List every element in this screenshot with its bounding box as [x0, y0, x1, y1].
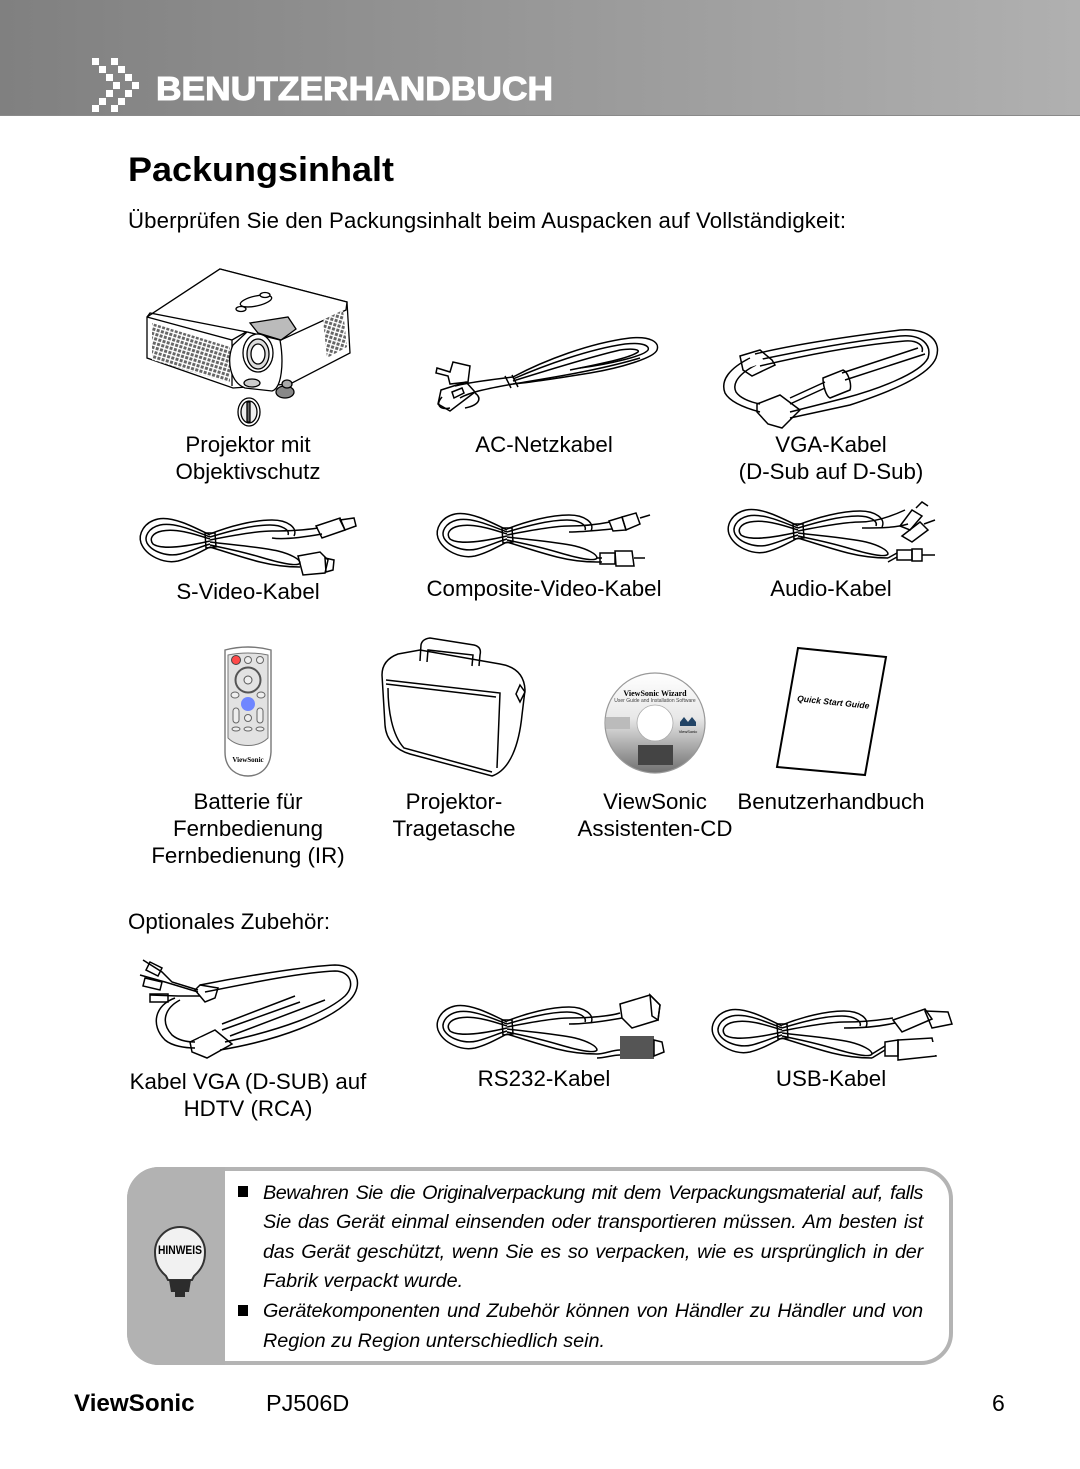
label: composite: Composite-Video-Kabel: [426, 576, 662, 601]
label: bag: Projektor-: [406, 789, 502, 814]
label: bag: Tragetasche: [392, 816, 516, 841]
illustration: composite video cable: [437, 513, 650, 566]
footer brand: ViewSonic: [74, 1390, 195, 1417]
label: VGA HDTV: HDTV (RCA): [184, 1096, 312, 1121]
note bullet 1: [238, 1186, 248, 1197]
label: remote: [151, 789, 345, 868]
label: remote: Batterie für: [193, 789, 303, 814]
label: VGA cable: VGA-Kabel: [775, 432, 887, 457]
illustration: S-Video cable: [140, 518, 356, 575]
icon: HINWEIS light bulb: [155, 1227, 205, 1297]
illustration: RS232 cable: [437, 995, 664, 1059]
label: bag: [392, 789, 516, 841]
label: CD: [578, 789, 732, 841]
icon: double chevron: [92, 58, 139, 112]
header title: BENUTZERHANDBUCH: [156, 70, 553, 107]
illustration: remote control: ViewSonic: [232, 756, 264, 764]
illustration: wizard CD: ViewSonic: [679, 729, 697, 734]
label: VGA HDTV: [130, 1069, 367, 1121]
note line 5: Gerätekomponenten und Zubehör können von Händler zu Händler und von: [263, 1300, 923, 1322]
note line 4: Fabrik verpackt wurde.: [263, 1270, 463, 1292]
page number: 6: [992, 1390, 1005, 1416]
label: remote: Fernbedienung: [173, 816, 323, 841]
label: AC cord: AC-Netzkabel: [475, 432, 613, 457]
page heading: Packungsinhalt: [128, 151, 394, 189]
illustration: quick start guide booklet: Quick Start Guide: [797, 693, 870, 711]
label: audio: Audio-Kabel: [770, 576, 892, 601]
footer model: PJ506D: [266, 1390, 349, 1416]
note line 3: das Gerät geschützt, wenn Sie es so verpacken, wie es ursprünglich in der: [263, 1241, 923, 1263]
illustration: wizard CD: ViewSonic Wizard: [623, 689, 687, 698]
label: projector: Objektivschutz: [176, 459, 320, 484]
label: VGA cable: [739, 432, 923, 484]
label: RS232: RS232-Kabel: [478, 1066, 610, 1091]
note line 1: Bewahren Sie die Originalverpackung mit dem Verpackungsmaterial auf, falls: [263, 1182, 923, 1204]
label: VGA cable: (D-Sub auf D-Sub): [739, 459, 923, 484]
illustration: wizard CD: User Guide and Installation Software: [614, 698, 696, 704]
illustration: quick start guide booklet: [777, 648, 886, 775]
illustration: audio cable: [728, 502, 935, 562]
optional accessories heading: Optionales Zubehör:: [128, 909, 330, 934]
icon: HINWEIS light bulb: HINWEIS: [158, 1245, 202, 1257]
label: VGA HDTV: Kabel VGA (D-SUB) auf: [130, 1069, 367, 1094]
illustration: AC power cord: [436, 338, 658, 411]
note line 6: Region zu Region unterschiedlich sein.: [263, 1330, 605, 1352]
label: CD: Assistenten-CD: [578, 816, 732, 841]
label: manual: Benutzerhandbuch: [737, 789, 925, 814]
illustration: VGA cable: [724, 330, 938, 428]
panel: note: [127, 1167, 953, 1365]
intro text: Überprüfen Sie den Packungsinhalt beim Auspacken auf Vollständigkeit:: [128, 208, 846, 233]
illustration: VGA to HDTV cable: [140, 960, 357, 1058]
illustration: remote control: [225, 647, 271, 776]
label: USB: USB-Kabel: [776, 1066, 886, 1091]
note line 2: Sie das Gerät einmal einsenden oder transportieren müssen. Am besten ist: [263, 1211, 923, 1233]
illustration: wizard CD: [605, 673, 705, 773]
illustration: USB cable: [712, 1009, 952, 1060]
illustration: carrying bag: [382, 638, 525, 776]
label: S-Video: S-Video-Kabel: [176, 579, 320, 604]
label: projector: Projektor mit: [185, 432, 311, 457]
header band: [0, 0, 1080, 116]
label: projector: [176, 432, 320, 484]
label: CD: ViewSonic: [603, 789, 707, 814]
illustration: projector with lens cap: [147, 269, 350, 426]
note bullet 2: [238, 1305, 248, 1316]
label: remote: Fernbedienung (IR): [151, 843, 345, 868]
